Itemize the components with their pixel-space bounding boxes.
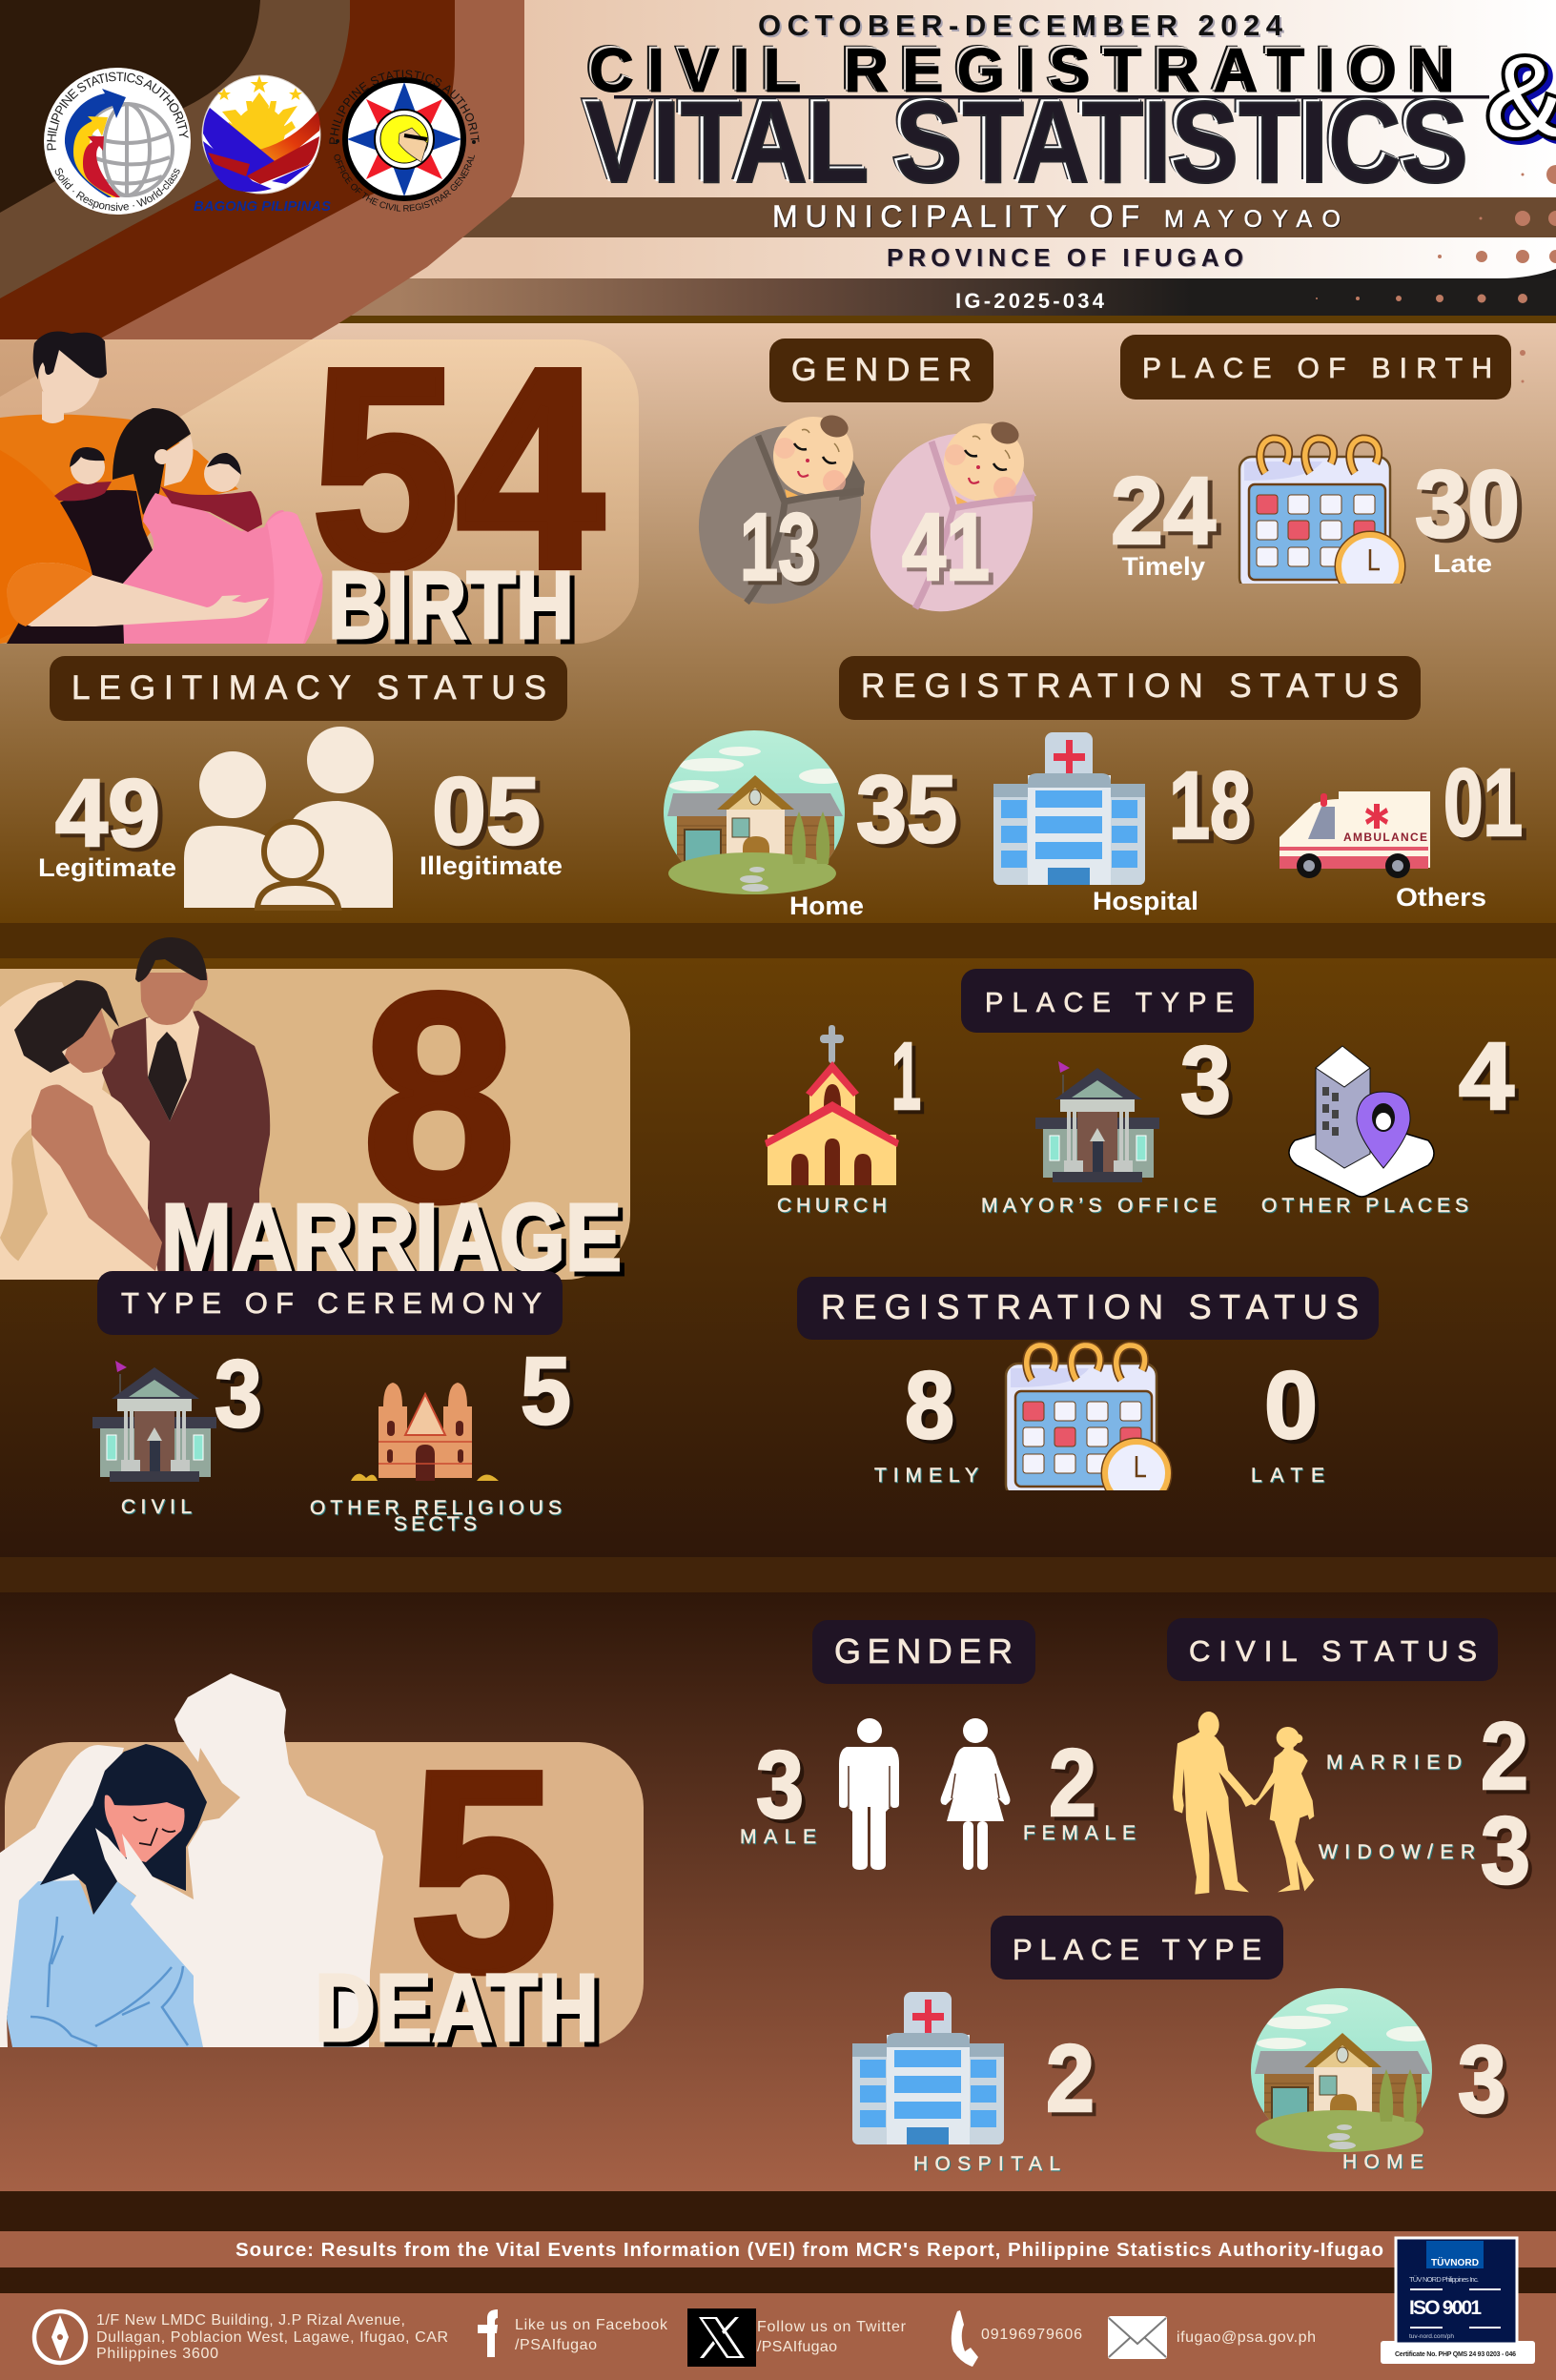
marriage count: 8 xyxy=(362,932,516,1262)
label: mayor's office: MAYOR’S OFFICE xyxy=(981,1195,1217,1217)
icon: hospital xyxy=(993,732,1145,885)
municipality line: MUNICIPALITY OF xyxy=(772,199,1139,234)
icon: religious building xyxy=(351,1383,499,1481)
number: illegitimate: 05 xyxy=(432,758,541,865)
title: civil registration: CIVIL REGISTRATION xyxy=(589,35,1455,105)
number: female: 2 xyxy=(1049,1730,1096,1836)
badge: ISO 9001 xyxy=(1381,2238,1535,2364)
label: late: Late xyxy=(1433,549,1492,578)
icon: home xyxy=(664,730,849,894)
icon: home xyxy=(1251,1988,1436,2152)
municipality line: MAYOYAO xyxy=(1164,206,1341,233)
label: late: LATE xyxy=(1251,1465,1324,1487)
address xyxy=(96,2312,448,2362)
number: hospital deaths: 2 xyxy=(1046,2025,1095,2132)
label: male: MALE xyxy=(740,1826,816,1848)
heading: gender: GENDER xyxy=(791,352,972,388)
label: illegitimate: Illegitimate xyxy=(420,851,563,880)
icon: couple silhouette xyxy=(1173,1712,1314,1895)
label: other places: OTHER PLACES xyxy=(1261,1195,1468,1217)
icon: church xyxy=(765,1025,899,1185)
label: hospital: Hospital xyxy=(1093,887,1198,915)
label: timely: Timely xyxy=(1122,552,1205,581)
heading: type of ceremony xyxy=(97,1271,563,1335)
heading: registration status: REGISTRATION STATUS xyxy=(861,667,1399,705)
number: widow/er: 3 xyxy=(1481,1797,1530,1904)
label: other religious sects: OTHER RELIGIOUS xyxy=(310,1497,562,1519)
province line: PROVINCE OF IFUGAO xyxy=(887,243,1243,272)
heading: civil status xyxy=(1167,1618,1498,1681)
heading: gender xyxy=(769,339,993,402)
number: girls: 41 xyxy=(902,494,990,601)
municipality line xyxy=(772,199,1341,234)
heading: type of ceremony: TYPE OF CEREMONY xyxy=(121,1286,542,1320)
phone number: 09196979606 xyxy=(981,2327,1082,2343)
address: Dullagan, Poblacion West, Lagawe, Ifugao, CAR xyxy=(96,2329,448,2346)
number: timely births: 24 xyxy=(1111,458,1216,564)
number: hospital births: 18 xyxy=(1169,752,1251,859)
marriage label: MARRIAGE xyxy=(161,1184,622,1291)
twitter text: /PSAIfugao xyxy=(757,2339,837,2355)
badge: ISO 9001: TÜVNORD xyxy=(1431,2256,1479,2268)
report code: IG-2025-034 xyxy=(955,289,1105,313)
illustration: couple xyxy=(0,937,270,1280)
death count: 5 xyxy=(409,1711,558,2031)
label: legitimate: Legitimate xyxy=(38,853,176,882)
badge: ISO 9001: Certificate No. PHP QMS 24 93 0203 - 046 xyxy=(1395,2351,1516,2358)
number: married: 2 xyxy=(1481,1703,1528,1810)
badge: ISO 9001: TÜV NORD Philippines Inc. xyxy=(1409,2275,1479,2284)
source note: Source: Results from the Vital Events Information (VEI) from MCR's Report, Philippine Statistics Authority-Ifugao xyxy=(235,2239,1383,2261)
number: other places: 4 xyxy=(1459,1023,1514,1130)
date heading: OCTOBER-DECEMBER 2024 xyxy=(758,9,1283,42)
label: home: HOME xyxy=(1342,2151,1423,2173)
number: civil: 3 xyxy=(215,1341,262,1447)
logo: Philippine Statistics Authority: PHILIPPINE STATISTICS AUTHORITY xyxy=(47,72,189,151)
label: others: Others xyxy=(1396,883,1486,912)
number: other births: 01 xyxy=(1443,749,1523,856)
label: female: FEMALE xyxy=(1023,1822,1136,1844)
icon: mayor's office xyxy=(1035,1061,1159,1182)
icon: female xyxy=(941,1718,1010,1870)
number: male: 3 xyxy=(756,1732,804,1838)
curved header stripes xyxy=(0,0,524,520)
number: boys: 13 xyxy=(740,494,816,601)
logo: Office of the Civil Registrar General: OFFICE OF THE CIVIL REGISTRAR GENERAL xyxy=(334,154,475,212)
label: other religious sects: SECTS xyxy=(394,1513,477,1535)
heading: registration status xyxy=(839,656,1421,720)
heading: place of birth xyxy=(1120,335,1511,400)
number: home deaths: 3 xyxy=(1458,2026,1506,2133)
heading: marriage registration status: REGISTRATION STATUS xyxy=(821,1287,1359,1326)
label: church: CHURCH xyxy=(777,1195,887,1217)
facebook text: Like us on Facebook xyxy=(515,2317,668,2333)
heading: place type: PLACE TYPE xyxy=(985,988,1234,1018)
heading: death place type xyxy=(991,1916,1283,1980)
twitter text: Follow us on Twitter xyxy=(757,2319,907,2335)
label: married: MARRIED xyxy=(1326,1752,1462,1774)
title rule xyxy=(614,95,1489,99)
panel: birth xyxy=(0,339,639,644)
icon: x xyxy=(687,2308,756,2367)
heading: death place type: PLACE TYPE xyxy=(1013,1933,1261,1966)
label: hospital: HOSPITAL xyxy=(913,2153,1060,2175)
number: late marriages: 0 xyxy=(1264,1352,1318,1459)
icon: family silhouette xyxy=(184,727,393,908)
number: religious: 5 xyxy=(521,1338,571,1445)
badge: ISO 9001: ISO 9001 xyxy=(1409,2297,1482,2319)
logo text: Bagong Pilipinas: BAGONG PILIPINAS xyxy=(194,198,331,215)
address: 1/F New LMDC Building, J.P Rizal Avenue, xyxy=(96,2312,405,2329)
label: timely: TIMELY xyxy=(874,1465,978,1487)
death label: DEATH xyxy=(315,1955,599,2062)
email: ifugao@psa.gov.ph xyxy=(1177,2329,1316,2346)
address: Philippines 3600 xyxy=(96,2346,218,2362)
heading: legitimacy status xyxy=(50,656,567,721)
number: home births: 35 xyxy=(856,756,957,863)
birth count: 54 xyxy=(313,311,604,626)
heading: marriage registration status xyxy=(797,1277,1379,1340)
label: home: Home xyxy=(789,892,864,920)
label: other religious sects xyxy=(310,1497,562,1535)
illustration: mourning figures xyxy=(0,1673,383,2047)
heading: civil status: CIVIL STATUS xyxy=(1189,1634,1477,1668)
birth label: BIRTH xyxy=(328,552,574,659)
panel: marriage xyxy=(0,969,630,1280)
badge: ISO 9001: tuv-nord.com/ph xyxy=(1409,2333,1454,2340)
number: late births: 30 xyxy=(1415,451,1520,558)
icon: ambulance xyxy=(1280,791,1430,878)
number: church: 1 xyxy=(891,1023,921,1130)
label: civil: CIVIL xyxy=(121,1496,192,1518)
heading: legitimacy status: LEGITIMACY STATUS xyxy=(72,669,546,707)
logo: Office of the Civil Registrar General xyxy=(329,70,480,212)
icon: phone xyxy=(952,2310,978,2367)
icon: civil building xyxy=(92,1361,216,1482)
number: timely marriages: 8 xyxy=(905,1352,954,1459)
icon: other places pin xyxy=(1289,1046,1434,1197)
facebook text xyxy=(515,2317,668,2353)
logo: Philippine Statistics Authority: Solid · Responsive · World-class xyxy=(55,168,180,211)
icon: marriage calendar xyxy=(1006,1345,1168,1505)
icon: baby girl xyxy=(840,405,1063,640)
icon: hospital xyxy=(852,1992,1004,2144)
heading: gender: GENDER xyxy=(834,1631,1013,1671)
icon: facebook xyxy=(478,2309,498,2357)
number: mayor's office: 3 xyxy=(1180,1027,1231,1134)
logo: Bagong Pilipinas xyxy=(202,75,320,194)
logo: Philippine Statistics Authority xyxy=(44,68,191,215)
heading: gender xyxy=(812,1620,1035,1684)
label: widow/er: WIDOW/ER xyxy=(1319,1841,1475,1863)
heading: place of birth: PLACE OF BIRTH xyxy=(1142,353,1492,384)
header bands xyxy=(286,165,1556,383)
number: legitimate: 49 xyxy=(55,760,160,867)
twitter text xyxy=(757,2319,907,2355)
icon: compass xyxy=(34,2311,86,2363)
icon: baby boy xyxy=(668,398,891,632)
panel: death xyxy=(5,1742,644,2047)
icon: male xyxy=(839,1718,899,1870)
icon: envelope xyxy=(1108,2316,1167,2359)
icon: ambulance: AMBULANCE xyxy=(1343,831,1427,844)
heading: place type xyxy=(961,969,1254,1033)
icon: calendar xyxy=(1239,439,1402,598)
facebook text: /PSAIfugao xyxy=(515,2337,597,2353)
illustration: family xyxy=(0,332,323,644)
